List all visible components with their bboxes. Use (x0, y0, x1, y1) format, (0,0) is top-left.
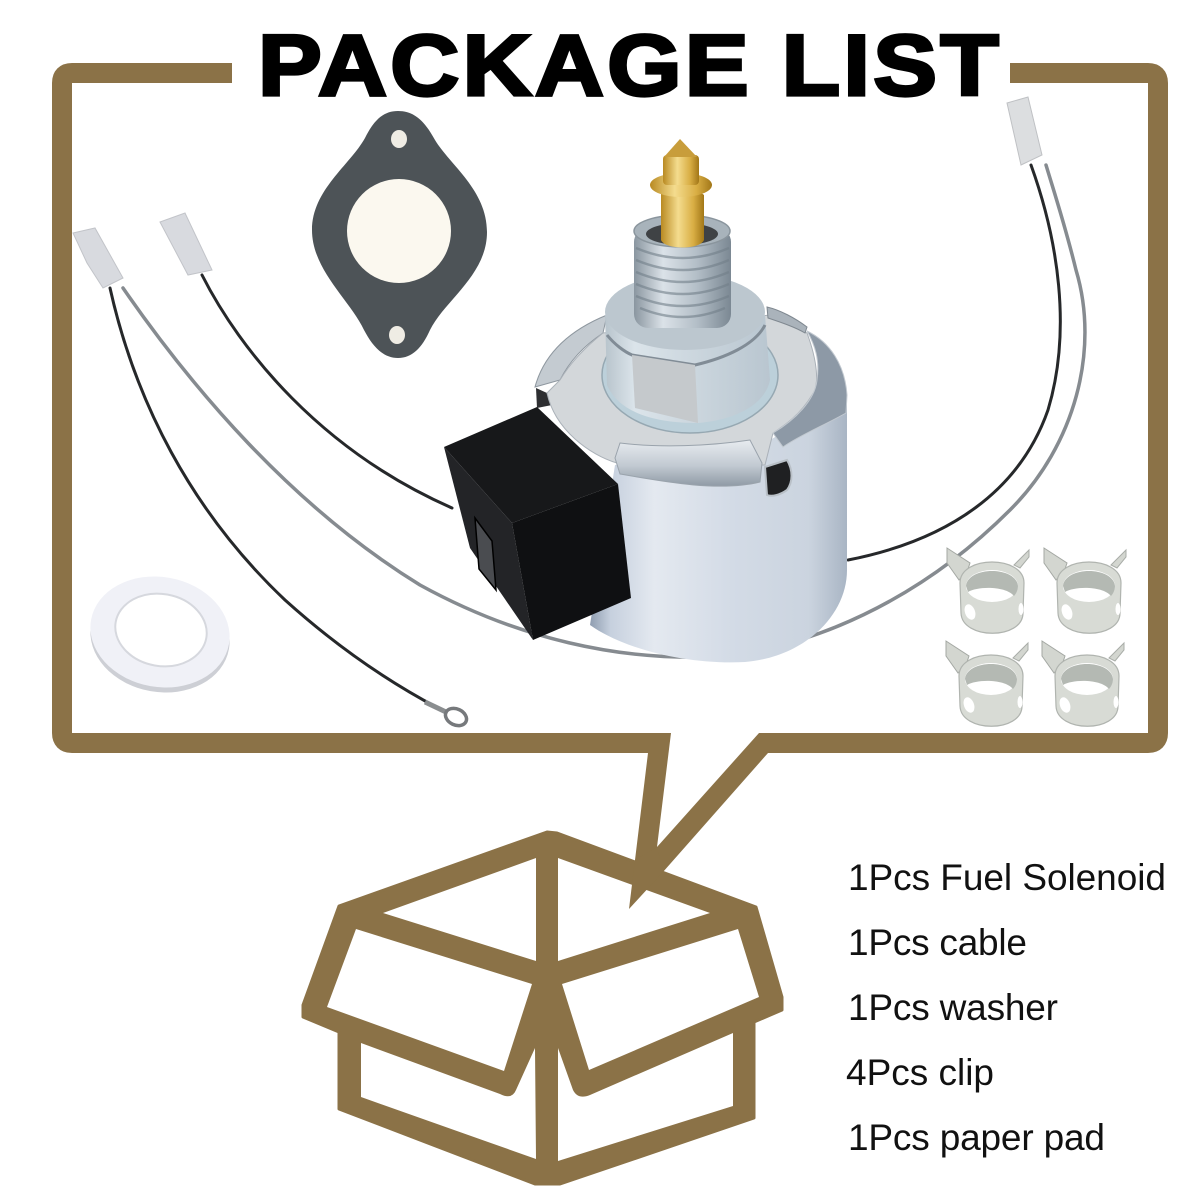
nut base chamfer ring (602, 317, 778, 433)
dark gap under rim (536, 388, 552, 408)
connector right (1007, 97, 1042, 165)
spring clips (946, 548, 1126, 726)
connector middle (160, 213, 212, 275)
black wire to ring terminal (110, 288, 438, 708)
slot (765, 460, 792, 496)
paper gasket (312, 111, 487, 358)
wires and cable (110, 165, 1085, 708)
clip 3 (946, 641, 1028, 726)
item 3: 1Pcs washer (848, 987, 1058, 1028)
top left rim strip (535, 315, 607, 387)
threaded stud (634, 215, 731, 328)
front clip tab (615, 440, 762, 486)
silver top disc (547, 315, 817, 465)
package speech bubble frame (62, 73, 1158, 909)
top right rim clip (767, 307, 807, 333)
fuel solenoid (444, 139, 847, 662)
icon: open cardboard box (303, 832, 782, 1184)
black connector housing (444, 407, 631, 640)
item 1: 1Pcs Fuel Solenoid (848, 857, 1166, 898)
ring terminal (425, 702, 469, 729)
item 4: 4Pcs clip (846, 1052, 994, 1093)
black wire, left connector to solenoid (202, 275, 452, 508)
nut (605, 315, 770, 423)
item 2: 1Pcs cable (848, 922, 1027, 963)
clip 2 (1044, 548, 1126, 633)
speech bubble tail (629, 733, 780, 909)
right rim band (773, 331, 847, 447)
black wire, right connector to solenoid (848, 165, 1060, 560)
brass pin (650, 139, 712, 248)
washer (82, 566, 238, 703)
clip 4 (1042, 641, 1124, 726)
connector left (73, 228, 123, 288)
clip 1 (947, 548, 1029, 633)
package contents list (846, 857, 1166, 1158)
solenoid cylinder body (590, 395, 847, 662)
hex nut top edge (607, 325, 765, 365)
gray cable wire, left to right (123, 165, 1085, 657)
item 5: 1Pcs paper pad (848, 1117, 1105, 1158)
hex face of nut (632, 355, 698, 423)
tail tip over the box (629, 847, 663, 909)
title: PACKAGE LIST (258, 18, 1002, 114)
